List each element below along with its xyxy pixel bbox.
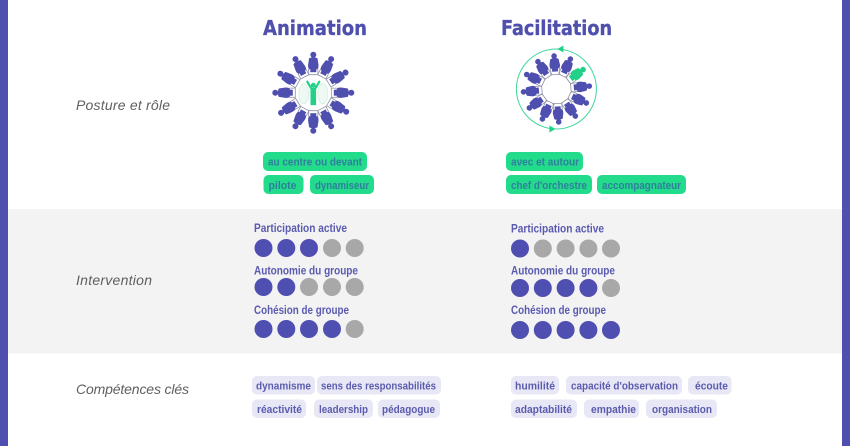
heading: Facilitation: Facilitation [501,16,612,40]
tags: animation skills: leadership [319,404,368,416]
tags: animation posture: au centre ou devant [268,156,362,168]
tags: facilitation skills: adaptabilité [515,404,572,416]
heading: Animation: Animation [263,16,367,40]
tags: animation skills: pédagogue [382,404,435,416]
tags: animation posture: dynamiseur [315,180,370,192]
tags: animation skills: dynamisme [256,380,311,392]
label: autonomie du groupe: Autonomie du groupe [254,266,358,278]
dots: cohésion 4 of 5 [254,320,364,338]
tags: facilitation posture: chef d'orchestre [511,180,587,192]
tags: animation skills: sens des responsabilités [321,380,436,392]
label: participation active: Participation active [511,224,604,236]
tags: facilitation posture: avec et autour [511,156,580,168]
dots: cohésion 5 of 5 [511,321,620,339]
label: cohésion de groupe: Cohésion de groupe [511,305,606,317]
tags: animation posture: pilote [268,180,296,192]
dots: autonomie 2 of 5 [254,278,364,296]
label: autonomie du groupe: Autonomie du groupe [511,266,615,278]
icon: facilitation circle with facilitator among the group [516,46,596,132]
panel: intervention band [8,209,842,354]
dots: participation 3 of 5 [254,239,364,257]
dots: autonomie 4 of 5 [511,279,620,297]
row label: Compétences clés: Compétences clés [76,381,189,397]
tags: facilitation posture [506,152,686,194]
label: cohésion de groupe: Cohésion de groupe [254,305,349,317]
row label: Intervention: Intervention [76,272,152,288]
tags: facilitation skills: écoute [695,380,728,392]
icon: animation circle with leader in the centre [272,52,354,134]
tags: facilitation skills [511,376,732,418]
tags: facilitation skills: organisation [652,404,712,416]
tags: facilitation posture: accompagnateur [602,180,682,192]
tags: animation skills: réactivité [257,404,302,416]
ratings: facilitation [511,224,620,339]
dots: participation 1 of 5 [511,240,620,258]
tags: facilitation skills: humilité [515,380,555,392]
row label: Posture et rôle: Posture et rôle [76,97,170,113]
left side bar [0,0,8,446]
tags: animation skills [252,376,441,418]
label: participation active: Participation active [254,223,347,235]
ratings: animation [254,223,364,338]
tags: facilitation skills: empathie [591,404,636,416]
right side bar [842,0,850,446]
tags: facilitation skills: capacité d'observation [571,380,678,392]
tags: animation posture [263,152,374,194]
